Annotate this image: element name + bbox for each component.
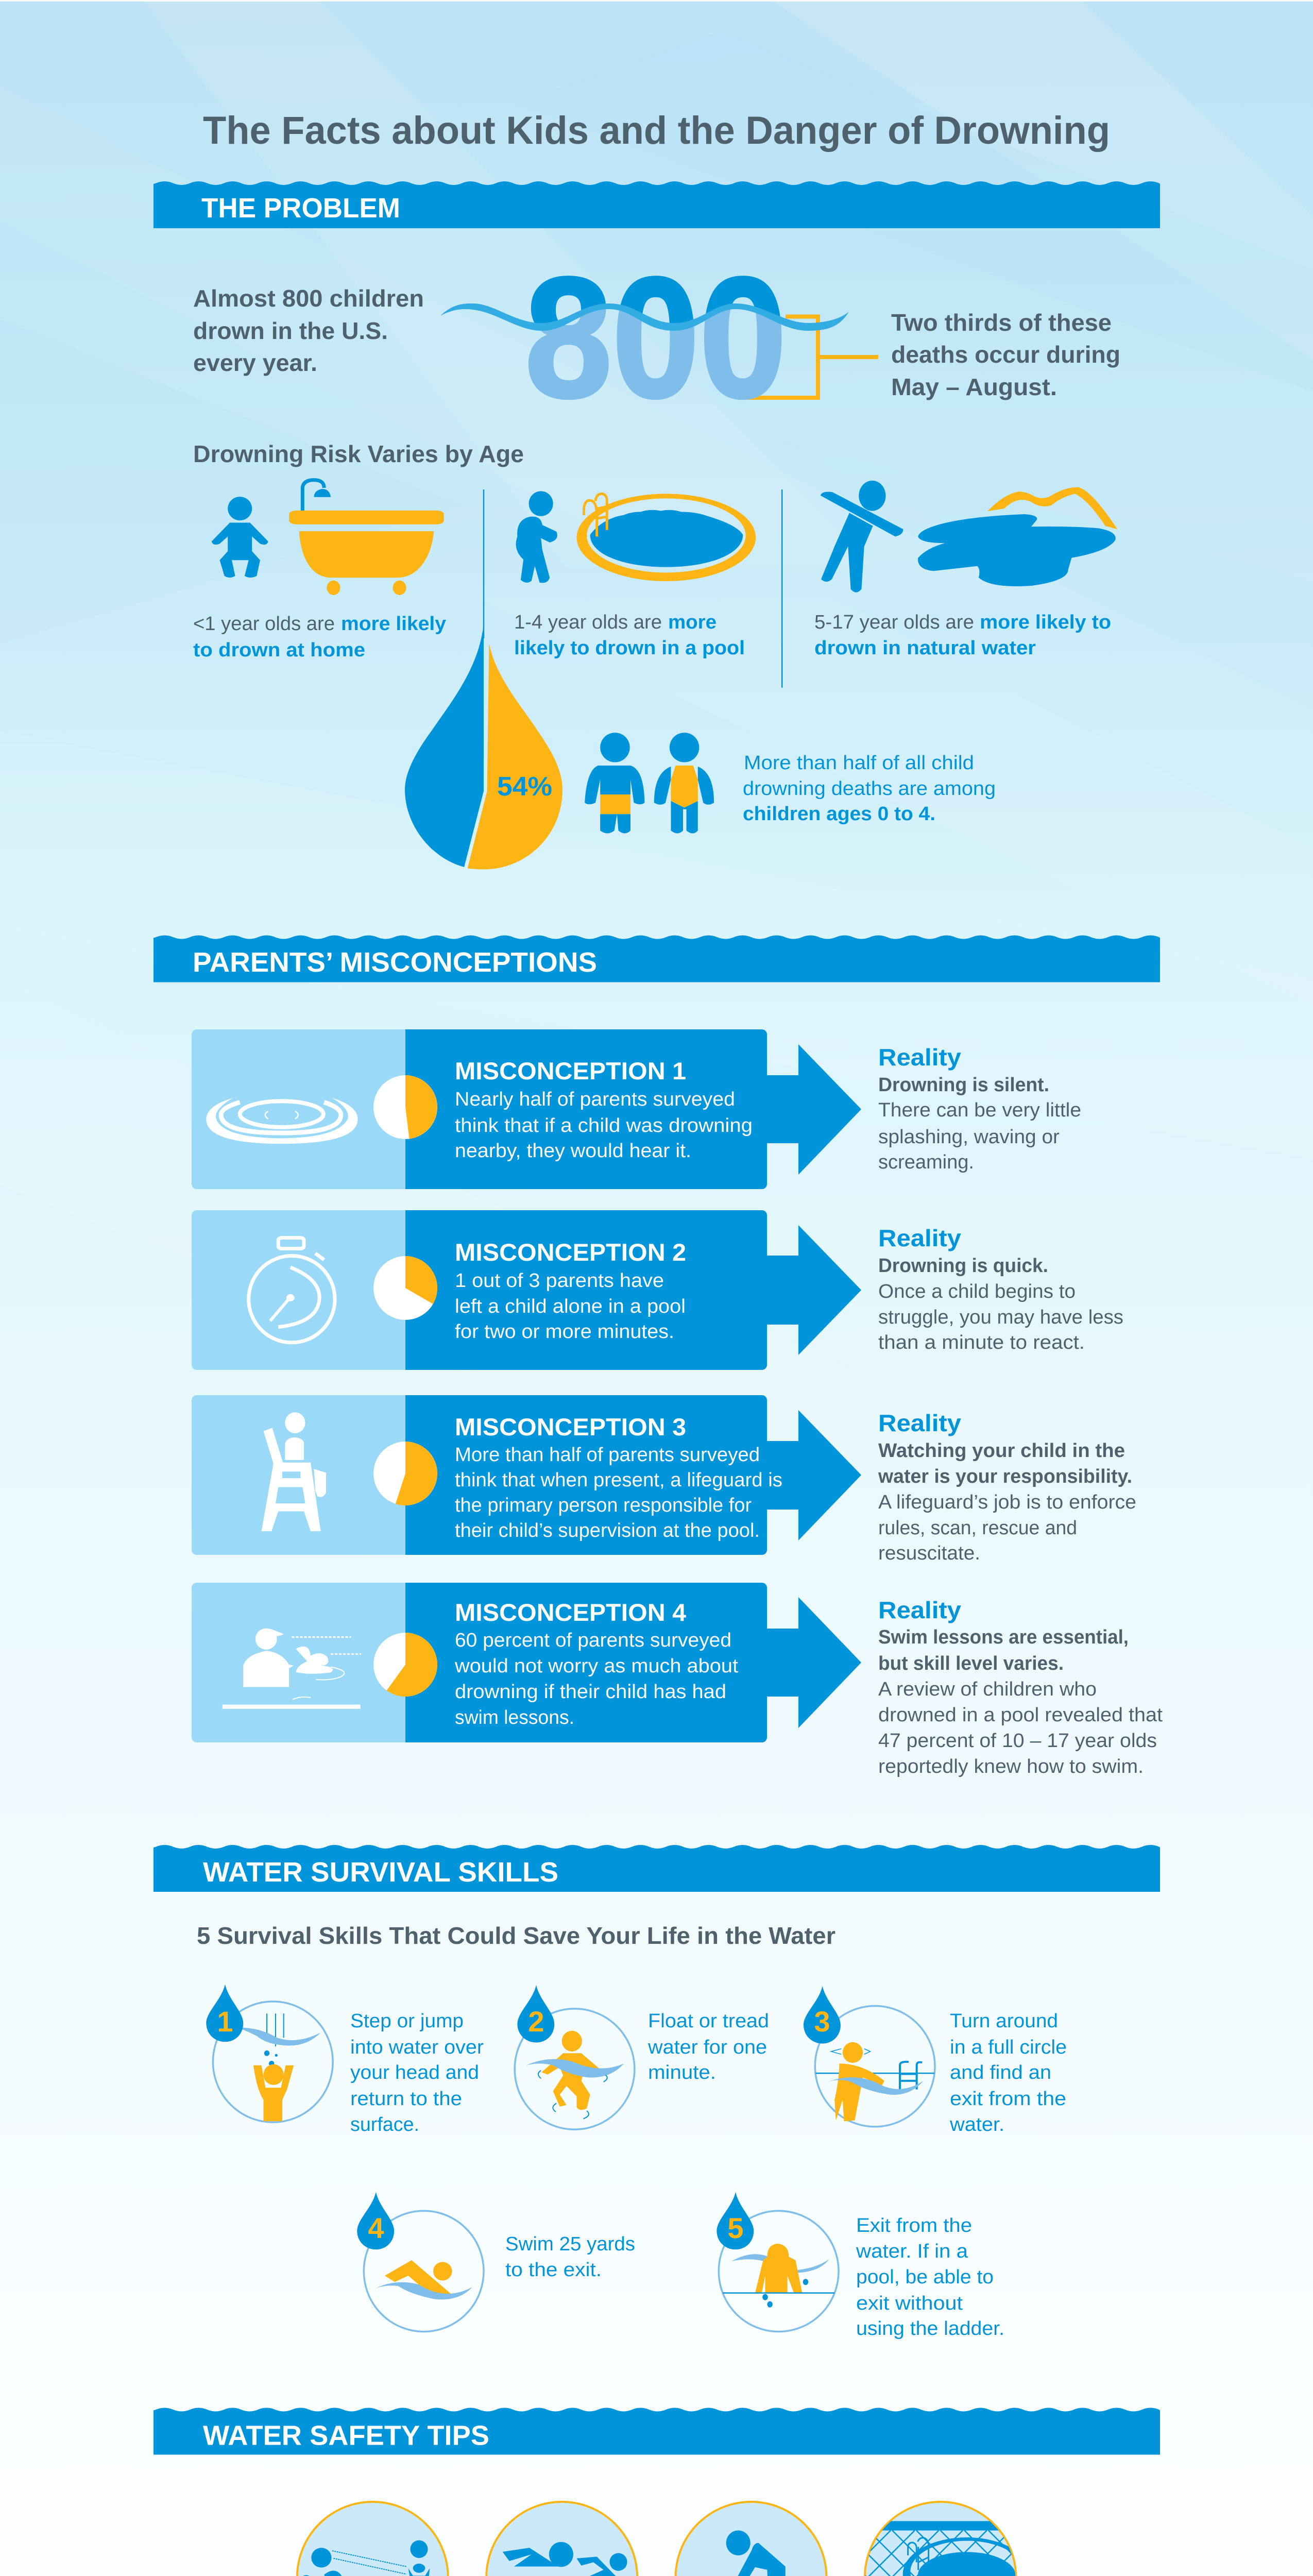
text: reality 2 xyxy=(878,1225,1123,1353)
arrow xyxy=(767,1225,861,1355)
numbers on drops: 1 xyxy=(217,2005,233,2038)
text: skill 1: return to the xyxy=(350,2088,462,2110)
text: age captions: more xyxy=(668,612,717,633)
skill icons xyxy=(206,1984,935,2332)
text: skill 5: exit without xyxy=(856,2293,963,2314)
text: two thirds: deaths occur during xyxy=(891,341,1120,368)
text: reality 3: A lifeguard’s job is to enforce xyxy=(878,1492,1136,1513)
text: skill 3 xyxy=(949,2010,1067,2136)
section header: water safety tips xyxy=(154,2408,1160,2454)
text xyxy=(455,1239,686,1343)
text xyxy=(454,1599,738,1728)
text: left a child alone in a pool xyxy=(455,1296,686,1317)
text: MISCONCEPTION 4 xyxy=(455,1599,686,1626)
text: almost 800 children: Almost 800 children xyxy=(193,285,424,312)
numbers on drops: 2 xyxy=(528,2005,544,2038)
text: age captions xyxy=(193,612,1111,661)
text: skill 1 xyxy=(350,2010,484,2136)
text: reality 3: water is your responsibility. xyxy=(878,1466,1132,1487)
text: age captions: to drown at home xyxy=(193,639,365,661)
text: skill 3: Turn around xyxy=(950,2010,1058,2032)
icon: swimmers xyxy=(479,2502,652,2576)
icon: stopwatch xyxy=(249,1238,335,1343)
text: skill 4: to the exit. xyxy=(505,2259,602,2281)
numbers on drops xyxy=(217,2005,830,2244)
big number 800: 800 xyxy=(525,242,787,433)
numbers on drops: 3 xyxy=(814,2005,830,2038)
panel: misconception 3 xyxy=(192,1395,861,1555)
text: skill 1: into water over xyxy=(350,2037,484,2058)
safety tip icons xyxy=(297,2502,826,2576)
text: Nearly half of parents surveyed xyxy=(455,1089,735,1110)
text: skill 5: pool, be able to xyxy=(856,2266,994,2288)
section header: the problem: THE PROBLEM xyxy=(201,193,400,224)
text: almost 800 children xyxy=(193,285,424,376)
text: skill 2: water for one xyxy=(647,2037,767,2058)
text: skill 5 xyxy=(856,2215,1004,2340)
icon: toddler xyxy=(516,491,557,583)
chart: pie 60 percent xyxy=(373,1633,437,1697)
text: reality 1 xyxy=(878,1044,1081,1173)
text xyxy=(455,1057,753,1162)
text: nearby, they would hear it. xyxy=(455,1140,691,1162)
text: almost 800 children: drown in the U.S. xyxy=(193,317,388,344)
big number 800: 800 xyxy=(525,242,787,433)
text: their child’s supervision at the pool. xyxy=(455,1520,760,1541)
text: skill 5: Exit from the xyxy=(856,2215,972,2236)
text: reality 1: Reality xyxy=(878,1044,961,1071)
text: skill 2 xyxy=(647,2010,769,2083)
text: reality 2: struggle, you may have less xyxy=(878,1307,1123,1328)
text: age captions: 1-4 year olds are xyxy=(514,612,662,633)
text: reality 3 xyxy=(878,1410,1136,1564)
icon: skill 2 float or tread xyxy=(515,1985,635,2129)
text: reality 4: but skill level varies. xyxy=(878,1653,1064,1674)
section header: water survival skills: WATER SURVIVAL SKILLS xyxy=(203,1857,558,1888)
text: skill 1: Step or jump xyxy=(350,2010,464,2032)
text: reality 4 xyxy=(878,1597,1163,1777)
text: skill 5: water. If in a xyxy=(856,2241,968,2262)
text: two thirds xyxy=(891,309,1120,400)
icon: ripple xyxy=(206,1098,358,1144)
icon: lifeguard watching swimmer xyxy=(223,1629,361,1709)
text: more than half: drowning deaths are among xyxy=(743,778,996,800)
text: skill 3: exit from the xyxy=(950,2088,1066,2110)
age icons xyxy=(212,480,1117,869)
text: MISCONCEPTION 2 xyxy=(455,1239,686,1266)
icon: skill 5 exit water xyxy=(717,2192,839,2332)
text: reality 4: reportedly knew how to swim. xyxy=(878,1756,1144,1777)
text: skill 2: Float or tread xyxy=(648,2010,769,2032)
text: skill 4 xyxy=(505,2233,635,2281)
bracket callout xyxy=(740,316,878,398)
text: reality 4: drowned in a pool revealed that xyxy=(878,1704,1163,1726)
panel: misconception 4 xyxy=(192,1583,861,1742)
text: skill 1: surface. xyxy=(350,2114,419,2136)
icon: older child xyxy=(821,481,903,592)
text: age captions: 5-17 year olds are xyxy=(814,612,974,633)
text: reality 2: Drowning is quick. xyxy=(878,1255,1048,1277)
chart: 54 percent drop xyxy=(405,623,562,869)
text: age captions: drown in natural water xyxy=(814,637,1036,659)
text: would not worry as much about xyxy=(454,1655,738,1677)
text: almost 800 children: every year. xyxy=(193,349,317,376)
text: 1 out of 3 parents have xyxy=(455,1270,664,1292)
text: reality 2: Once a child begins to xyxy=(878,1281,1076,1302)
text: reality 3: Watching your child in the xyxy=(878,1440,1125,1462)
icon: pool fence xyxy=(864,2501,1017,2576)
section header: the problem xyxy=(154,181,1160,228)
icon: cpr xyxy=(676,2502,826,2576)
icon: boy and girl xyxy=(585,733,714,834)
text: more than half xyxy=(743,752,996,825)
subheading: 5 survival skills: 5 Survival Skills That Could Save Your Life in the Water xyxy=(197,1922,835,1949)
panel: misconception 1 xyxy=(192,1029,861,1189)
icon: baby xyxy=(212,497,268,578)
text: 60 percent of parents surveyed xyxy=(455,1630,731,1651)
text: MISCONCEPTION 1 xyxy=(455,1057,686,1084)
text xyxy=(455,1413,782,1541)
text: reality 3: resuscitate. xyxy=(878,1543,980,1564)
arrow xyxy=(767,1044,861,1175)
arrow xyxy=(767,1597,861,1728)
text: skill 2: minute. xyxy=(648,2062,716,2083)
text: age captions: likely to drown in a pool xyxy=(514,637,745,659)
icon: lifeguard chair xyxy=(262,1412,326,1531)
numbers on drops: 5 xyxy=(727,2212,744,2244)
icon: skill 4 swim xyxy=(357,2192,484,2332)
text: reality 1: splashing, waving or xyxy=(878,1126,1060,1148)
text: reality 2: Reality xyxy=(878,1225,961,1251)
text: skill 3: in a full circle xyxy=(950,2037,1067,2058)
arrow xyxy=(767,1410,861,1540)
section header: water survival skills xyxy=(154,1845,1160,1892)
text: two thirds: Two thirds of these xyxy=(891,309,1112,336)
text: age captions: more likely xyxy=(341,613,446,635)
icon: bathtub xyxy=(289,480,444,595)
section header: misconceptions xyxy=(154,936,1160,982)
text: swim lessons. xyxy=(455,1707,574,1728)
text: reality 1: There can be very little xyxy=(878,1099,1081,1121)
text: drowning if their child has had xyxy=(455,1681,726,1703)
section header: water safety tips: WATER SAFETY TIPS xyxy=(203,2420,489,2451)
text: reality 4: Reality xyxy=(878,1597,961,1623)
text: reality 4: A review of children who xyxy=(878,1679,1097,1700)
text: reality 1: Drowning is silent. xyxy=(878,1074,1049,1096)
text: age captions: <1 year olds are xyxy=(193,613,335,635)
chart: pie about 47 percent xyxy=(373,1075,437,1139)
text: reality 2: than a minute to react. xyxy=(878,1332,1085,1353)
text: reality 3: Reality xyxy=(878,1410,961,1436)
big number 800 xyxy=(440,276,849,400)
text: reality 1: screaming. xyxy=(878,1151,974,1173)
text: skill 1: your head and xyxy=(350,2062,479,2083)
text: age captions: more likely to xyxy=(980,612,1111,633)
panel: misconception 2 xyxy=(192,1210,861,1370)
text: skill 3: and find an xyxy=(950,2062,1051,2083)
icon: watch kids xyxy=(297,2502,448,2576)
text: the primary person responsible for xyxy=(455,1495,752,1516)
text: skill 5: using the ladder. xyxy=(856,2318,1004,2340)
icon: pool xyxy=(576,494,756,581)
chart: pie 55 percent xyxy=(373,1442,437,1505)
section header: misconceptions: PARENTS’ MISCONCEPTIONS xyxy=(193,947,597,978)
text: MISCONCEPTION 3 xyxy=(455,1413,686,1440)
icon: skill 1 step or jump xyxy=(206,1984,333,2122)
label: 54%: 54% xyxy=(497,772,552,802)
icon: skill 3 turn around xyxy=(804,1986,935,2127)
text: think that when present, a lifeguard is xyxy=(455,1469,782,1491)
text: two thirds: May – August. xyxy=(891,374,1057,400)
numbers on drops: 4 xyxy=(368,2212,384,2244)
divider lines xyxy=(484,489,782,688)
text: for two or more minutes. xyxy=(455,1321,674,1343)
text: think that if a child was drowning xyxy=(455,1115,753,1137)
chart: pie one third xyxy=(373,1256,437,1320)
text: More than half of parents surveyed xyxy=(455,1444,760,1466)
title: The Facts about Kids and the Danger of Drowning xyxy=(203,109,1110,152)
text: more than half: More than half of all child xyxy=(744,752,974,774)
text: more than half: children ages 0 to 4. xyxy=(743,803,935,825)
icon: natural water xyxy=(918,487,1117,586)
text: reality 3: rules, scan, rescue and xyxy=(878,1517,1077,1539)
text: skill 4: Swim 25 yards xyxy=(505,2233,635,2255)
text: reality 4: 47 percent of 10 – 17 year olds xyxy=(878,1730,1157,1752)
text: reality 4: Swim lessons are essential, xyxy=(878,1626,1129,1648)
text: skill 3: water. xyxy=(949,2114,1004,2136)
subheading: risk by age: Drowning Risk Varies by Age xyxy=(193,440,524,467)
